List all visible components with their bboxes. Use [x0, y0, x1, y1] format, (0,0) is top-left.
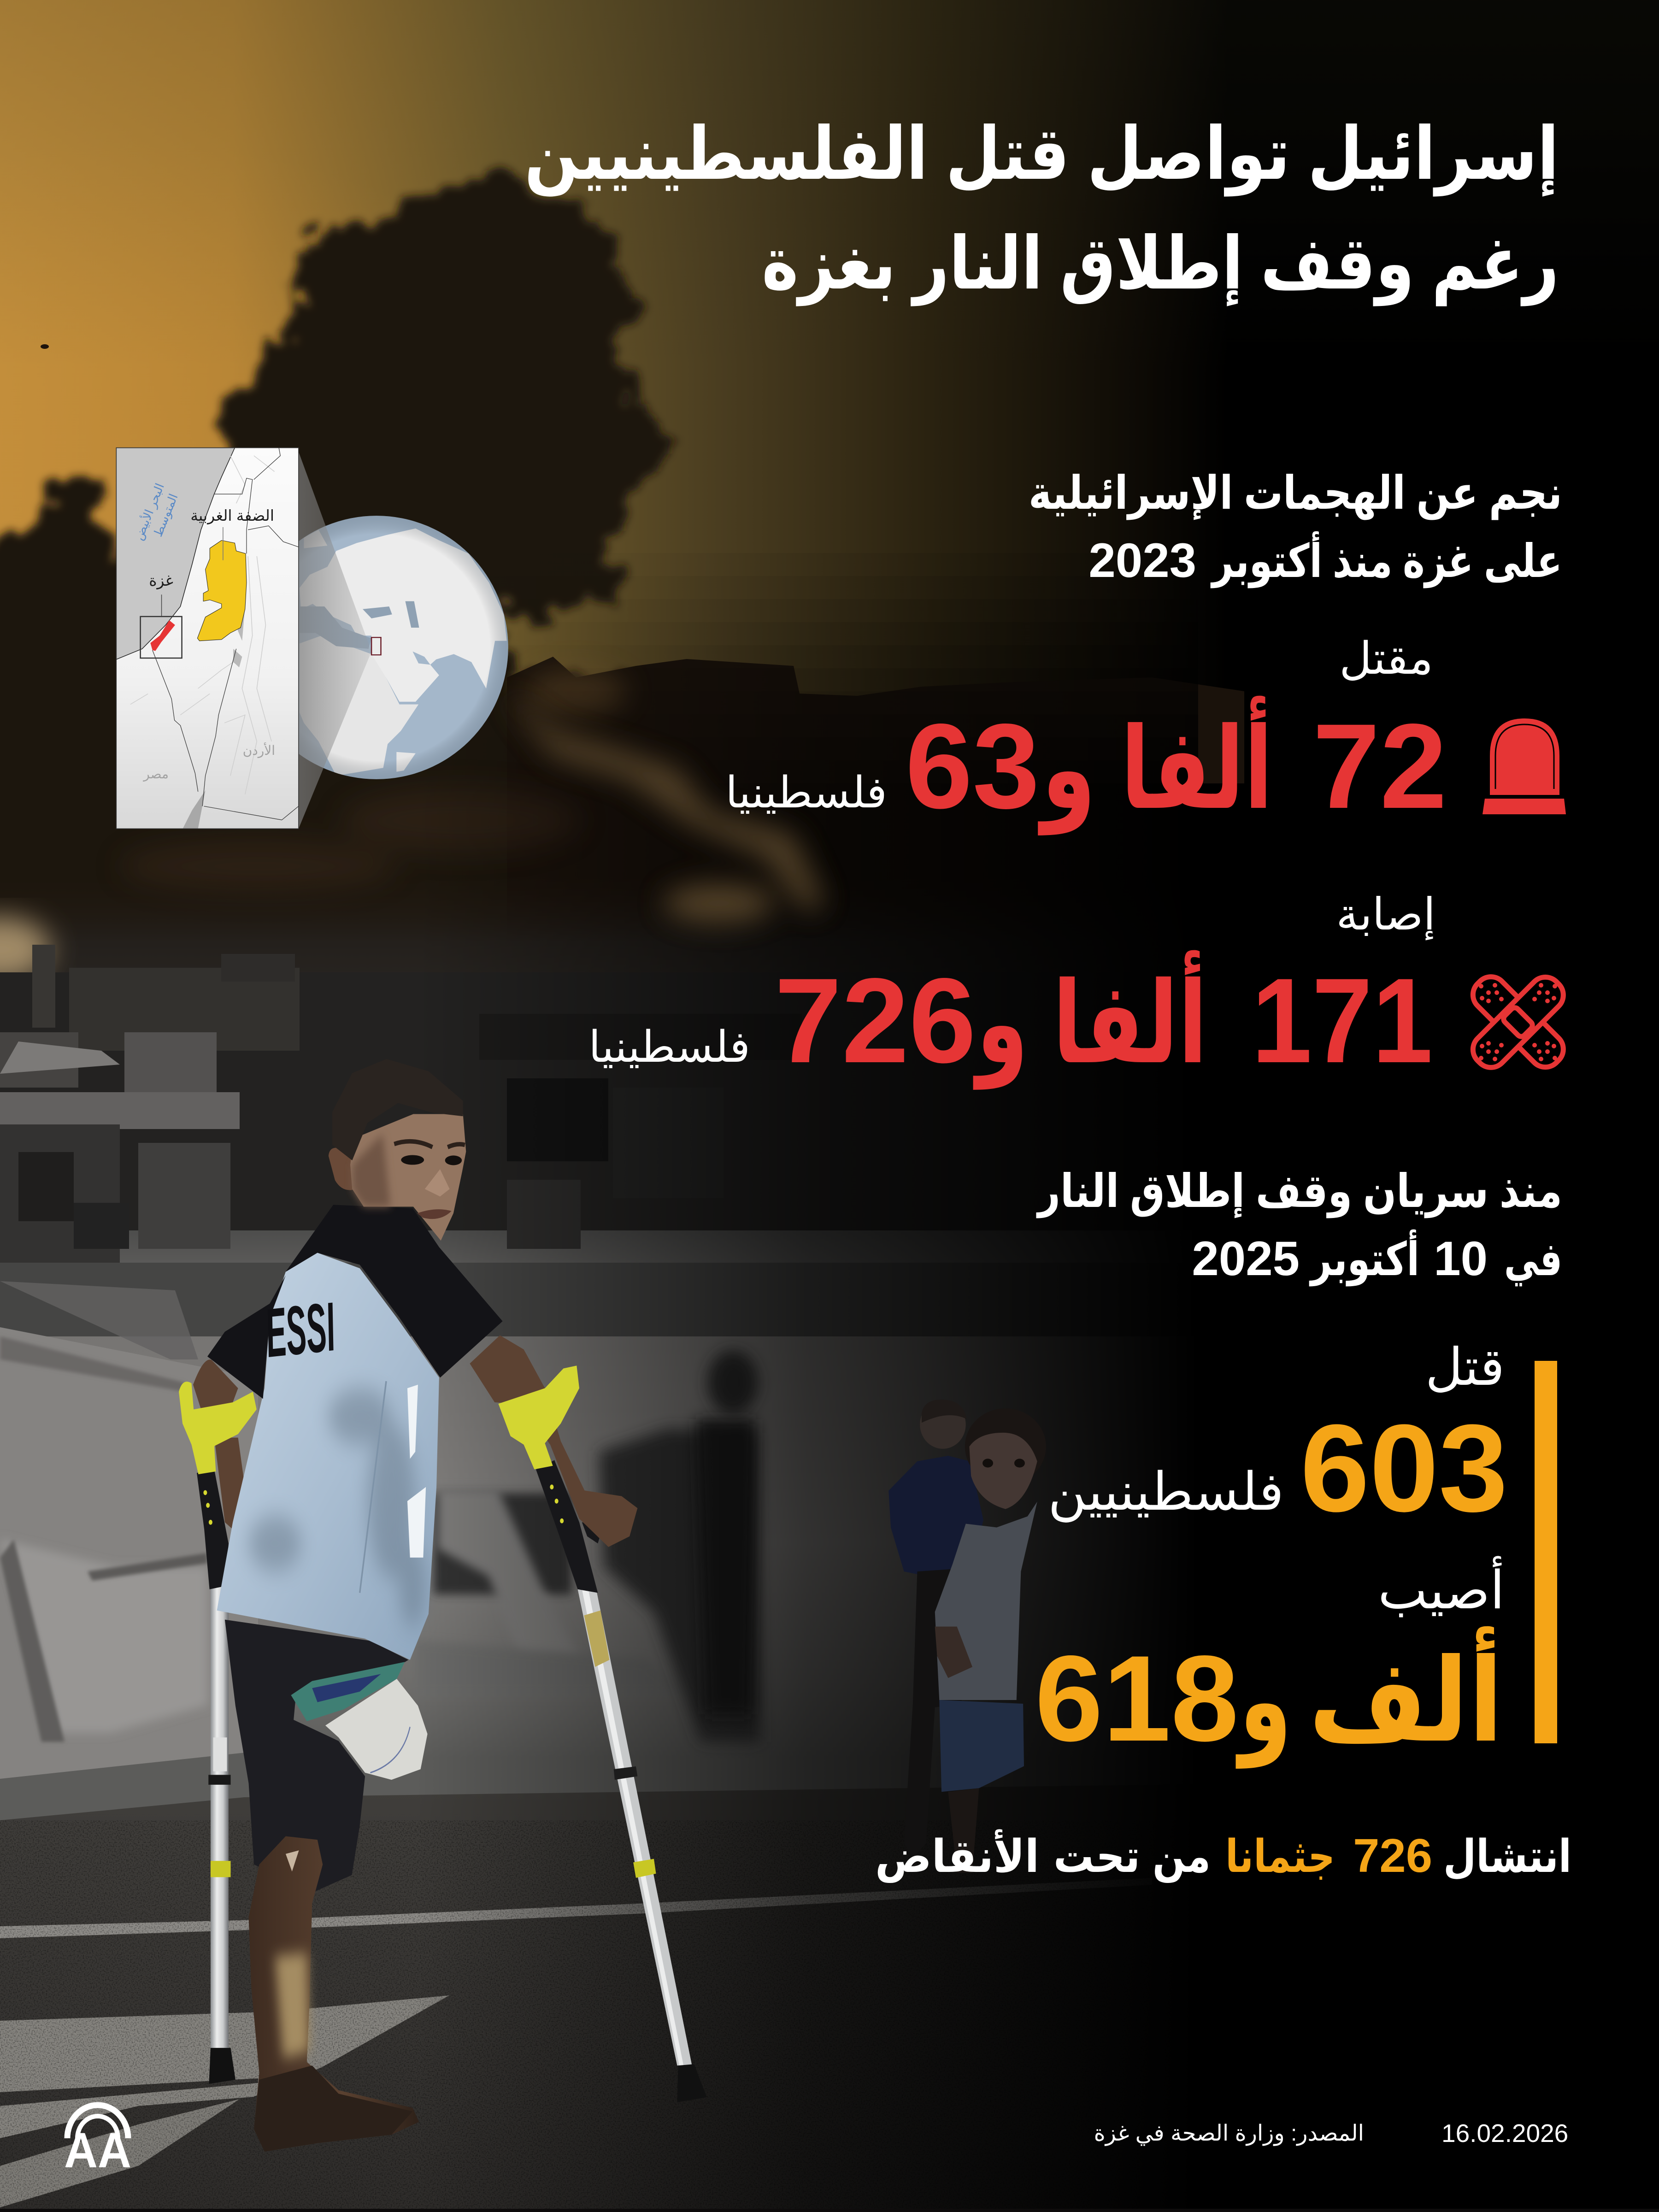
recovered bodies line: 726 — [1353, 1829, 1432, 1882]
left crutch — [197, 1469, 235, 2084]
smoke cloud — [0, 173, 691, 991]
warm haze in smoke — [120, 668, 627, 894]
subheading: since ceasefire: أكتوبر — [1309, 1229, 1419, 1287]
boy on crutches: ESSI — [262, 1288, 339, 1372]
subheading: since ceasefire — [1036, 1165, 1562, 1287]
map label: Jordan: الأردن — [243, 742, 275, 758]
globe — [299, 516, 508, 779]
stat: killed total: ألفا — [1121, 695, 1273, 832]
title — [524, 113, 1559, 306]
sea — [116, 448, 235, 659]
subheading: since ceasefire: في — [1504, 1234, 1562, 1287]
children in the dark — [888, 1400, 1046, 1873]
bird speck — [41, 344, 49, 349]
label: killed since ceasefire: قتل — [1425, 1338, 1505, 1396]
boy on crutches — [179, 1059, 707, 2152]
ruined buildings — [0, 945, 1244, 1359]
right crutch — [536, 1460, 707, 2102]
icon: crossed bandages — [1466, 971, 1570, 1074]
subheading: since ceasefire: 10 — [1434, 1232, 1488, 1286]
stat: killed total — [906, 695, 1447, 836]
tents — [0, 1327, 760, 1779]
lower photo base — [0, 876, 1244, 2212]
stat: injured total: 726 — [775, 953, 976, 1088]
gaza — [150, 620, 175, 651]
stat: killed total: و — [1037, 706, 1096, 836]
stat: injured total: 171 — [1252, 953, 1433, 1088]
stat: injured total: و — [973, 960, 1028, 1090]
label: killed: مقتل — [1339, 633, 1433, 683]
zoom cone — [299, 452, 371, 829]
right black fade — [415, 553, 1659, 2212]
stat: injured total — [775, 950, 1433, 1090]
distant smoke into ruins — [0, 917, 51, 982]
stat: 1618 injured: 618 — [1035, 1630, 1239, 1767]
shirt — [207, 1205, 503, 1660]
stat: injured total: ألفا — [1053, 950, 1207, 1086]
stat: killed total: 72 — [1313, 699, 1447, 834]
globe marker — [371, 637, 381, 655]
child in front — [935, 1408, 1046, 1873]
map label: Mediterranean: المتوسط — [151, 492, 181, 539]
stat unit: Palestinians: فلسطينيا — [725, 768, 887, 817]
relief — [130, 456, 275, 794]
yellow cuffs — [179, 1365, 579, 1474]
waist wrap — [291, 1662, 405, 1721]
stat: 1618 injured — [1035, 1626, 1503, 1769]
subheading: since October 2023 — [1029, 467, 1562, 588]
raglan sleeves — [286, 1205, 503, 1377]
stat: 1618 injured: ألف — [1309, 1626, 1503, 1765]
map panel — [116, 448, 299, 829]
logo: Anadolu Agency: AA — [64, 2122, 131, 2178]
shorts, stump and leg — [225, 1620, 428, 2152]
recovered bodies line: من — [1153, 1831, 1211, 1883]
child behind — [888, 1400, 983, 1858]
recovered bodies line: الأنقاض — [875, 1829, 1039, 1883]
dead sea and gulf — [233, 606, 245, 667]
map label: Mediterranean — [131, 481, 182, 548]
standing leg — [249, 1836, 419, 2152]
sunset sky — [0, 0, 1659, 968]
stat: 603: 603 — [1300, 1399, 1508, 1538]
recovered bodies line: انتشال — [1443, 1831, 1571, 1882]
map label: Gaza: غزة — [149, 572, 173, 589]
west bank — [197, 541, 247, 641]
label: injured since ceasefire: أصيب — [1378, 1556, 1505, 1620]
map label: Mediterranean: البحر الأبيض — [131, 481, 167, 542]
bandaged stump — [325, 1679, 428, 1780]
date: 16.02.2026 — [1441, 2119, 1568, 2147]
lit smoke plume — [502, 691, 825, 923]
stat: killed total: 63 — [906, 699, 1040, 834]
stat unit: Palestinians: فلسطينيين — [1048, 1463, 1284, 1523]
distant skyline — [507, 657, 1244, 991]
map label: Egypt: مصر — [142, 767, 169, 782]
recovered bodies line — [875, 1829, 1571, 1883]
recovered bodies line: تحت — [1053, 1831, 1140, 1882]
borders — [153, 448, 299, 820]
stat unit: Palestinians: فلسطينيا — [588, 1023, 750, 1071]
arms — [193, 1335, 637, 1547]
map label: West Bank: الضفة الغربية — [190, 507, 274, 524]
label: injured: إصابة — [1336, 890, 1435, 941]
subheading: since October 2023: نجم عن الهجمات الإسرائيلية — [1029, 467, 1562, 520]
locator map with globe — [116, 448, 508, 829]
orange vertical bar — [1535, 1361, 1557, 1743]
subheading: since October 2023: 2023 — [1088, 534, 1196, 588]
subheading: since ceasefire: 2025 — [1192, 1232, 1300, 1286]
head — [329, 1059, 466, 1241]
recovered bodies line: جثمانا — [1225, 1831, 1335, 1882]
icon: gravestone — [1483, 718, 1566, 814]
subheading: since ceasefire: منذ سريان وقف إطلاق النار — [1036, 1165, 1562, 1218]
subheading: since October 2023: على غزة منذ أكتوبر — [1210, 531, 1562, 588]
source: المصدر: وزارة الصحة في غزة — [1094, 2121, 1364, 2146]
stat: 1618 injured: و — [1235, 1636, 1292, 1769]
road — [0, 1783, 1244, 2212]
